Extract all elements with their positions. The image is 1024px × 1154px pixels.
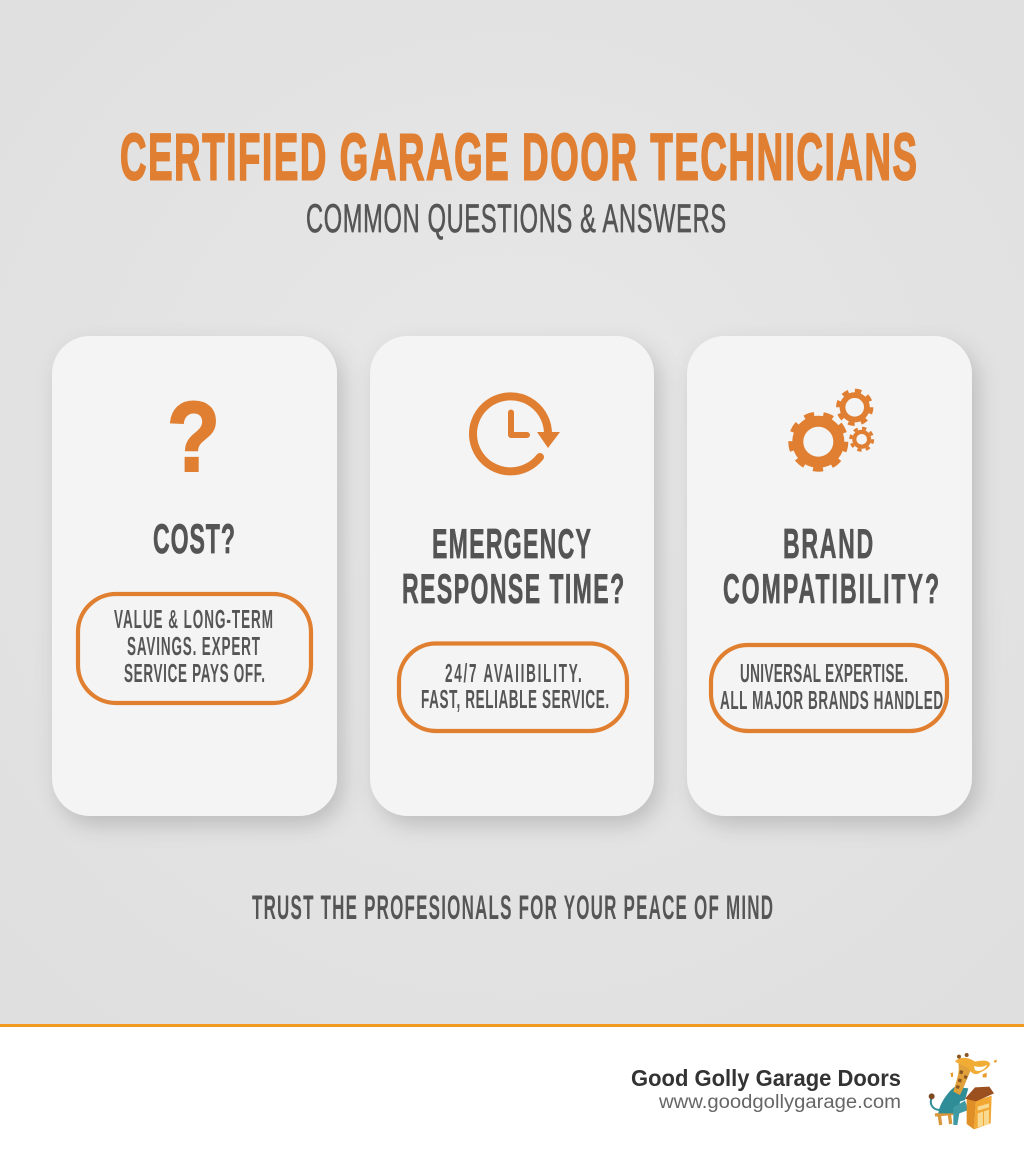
tagline: TRUST THE PROFESIONALS FOR YOUR PEACE OF MIND <box>252 889 773 927</box>
callout: brand answer: UNIVERSAL EXPERTISE. <box>740 661 908 688</box>
heading: brand compatibility: COMPATIBILITY? <box>723 566 939 613</box>
heading: cost: COST? <box>153 516 235 563</box>
callout: cost answer <box>78 594 311 703</box>
panel: cost <box>52 336 337 816</box>
panel: emergency response <box>370 336 654 816</box>
icon: question mark: ? <box>167 382 220 492</box>
heading: emergency response time: RESPONSE TIME? <box>402 566 624 613</box>
heading: emergency response time <box>402 521 624 613</box>
callout: emergency answer <box>399 644 627 731</box>
icon: gears <box>791 391 873 469</box>
callout: emergency answer: FAST, RELIABLE SERVICE. <box>421 687 609 714</box>
website: www.goodgollygarage.com <box>658 1092 901 1113</box>
callout: cost answer: VALUE & LONG-TERM <box>114 607 273 634</box>
callout: cost answer: SERVICE PAYS OFF. <box>124 661 265 688</box>
callout: cost answer: SAVINGS. EXPERT <box>127 634 260 661</box>
heading: emergency response time: EMERGENCY <box>432 521 591 568</box>
icon: giraffe with garage piano <box>929 1053 997 1129</box>
callout: brand answer <box>711 645 947 731</box>
heading: brand compatibility: BRAND <box>783 521 873 568</box>
heading: brand compatibility <box>723 521 939 613</box>
callout: brand answer: ALL MAJOR BRANDS HANDLED <box>720 688 943 715</box>
footer <box>0 1024 1024 1154</box>
subtitle: COMMON QUESTIONS & ANSWERS <box>306 195 726 241</box>
callout: emergency answer: 24/7 AVAIIBILITY. <box>445 661 582 688</box>
panel: brand compatibility <box>687 336 972 816</box>
brand name: Good Golly Garage Doors <box>631 1065 901 1091</box>
icon: clock with arrow <box>473 396 560 471</box>
title: CERTIFIED GARAGE DOOR TECHNICIANS <box>120 121 917 194</box>
